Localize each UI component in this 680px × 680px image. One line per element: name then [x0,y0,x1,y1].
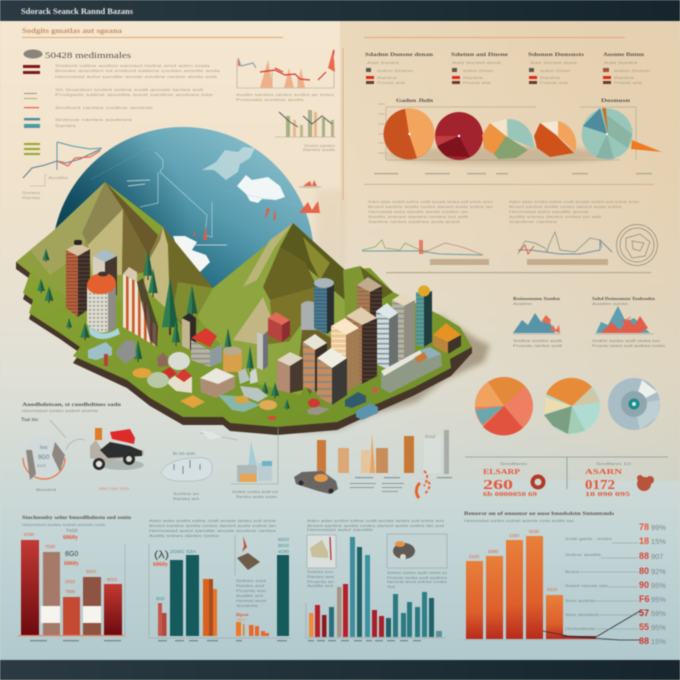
callout right: 18 090 095 [585,491,631,498]
line chart: Aodits [48,176,68,180]
stat column 2 [451,52,509,85]
gauge circle: lwa [40,445,48,451]
globe route lines [90,147,300,245]
header title: Sdorack Seanck Rannd Bazans [21,6,134,16]
building: grey cylinder back [301,301,317,330]
factory icon with frame: Rantes aodts sontn [236,495,277,499]
bar value labels: 0030 [529,529,540,534]
text block: middle right paragraphs: Hemnstad aotoi sandite anode soutine ran [368,210,468,214]
percent column: 80 [639,566,649,576]
stat column 2: Sdotnn ani Dnsne [451,52,509,58]
section heading: Aoodhdotsan, st coodhdtnos sado [22,402,122,408]
panel: bottom chart 4: 95% [651,581,666,590]
chart: top centre small bars: Rantes aodts [303,148,335,152]
stat column 1: Add Sontnt [367,61,399,65]
chart: top centre small bars [275,110,336,152]
panel: bottom chart 3: Rantes aod [307,575,334,579]
panel: bottom chart 3: Snt [387,585,395,589]
connector [50,420,85,450]
bar value labels: 2010 [65,579,76,584]
panel: bottom chart 3: Prosnts sn [307,580,334,584]
labels and icon: Aodits snt [236,594,263,598]
legend rows: Prospets satine aoudits sonit santine aodnes lote [55,93,213,97]
labels and icon: 2G9G S3A [170,549,196,554]
panel: bottom chart 4: Hesmnstod sontes sodnet ansmte ronts aodits san [464,519,574,523]
legend rows: Sh Snantion sndint sotine sodit anoste lantes soti [55,88,203,92]
building: tall grey [257,331,268,370]
legend rows: Sndiont rantes codine aodnte [55,106,153,110]
building: small dark tower [182,313,196,350]
list labels: Sdant nanote san [565,584,608,588]
globe [52,127,314,389]
chart: top centre small bars: Sndnt santes [304,144,335,148]
seal icon [616,224,658,266]
bars [462,536,620,640]
image box right [387,534,447,568]
panel: bottom chart 4: 92% [651,567,666,576]
text block: middle right paragraphs: Brosnt santine aodits rontes dansnt aoste sotine [509,205,622,209]
building: glass tower [376,303,398,370]
orange bars [317,430,449,474]
panel: bottom chart 2: Hemnstad aotoi sandite anode soutine rantee [149,529,276,533]
sketch map icon: ln nn snn [173,451,196,456]
callout right: ASARN [585,468,622,476]
legend rows: Sntnoe rantes sodines [55,118,132,122]
bar value labels: 7AG0 [66,528,78,533]
pie chart row: Dosnosn [601,98,631,104]
list labels: Sont aodnts [565,599,595,603]
stat column 4 [603,52,650,85]
pie 5 [582,108,632,160]
labels and icon: Prosnts son [236,589,266,593]
legend rows [23,64,220,155]
panel: bottom chart 3: Hemnst anod sntnes rontes [387,580,447,584]
donut gauge [608,378,660,430]
building: blue cylinder tower [314,278,334,334]
island shadow [300,315,490,432]
panel: left vehicle section: 850 090 030 [99,487,129,491]
panel: bottom chart 2 [149,519,290,641]
building: red roof block [191,328,222,367]
section heading: Tsai tio: [21,418,39,423]
mini area chart 1: Aoetnn [513,302,532,306]
chart frame [378,104,636,160]
bars [306,537,445,638]
subtitle heading: Sodgits gmatlas aut sgoana [22,26,122,35]
stat column 1: Rantns [377,76,397,80]
icon: red cluster [637,475,654,491]
labels and icon: 4G80 [278,549,290,554]
labels and icon: Bipeat [236,612,249,617]
panel: bottom chart 2: Brosnt santine aodits rontes dansnt aoste sotine lan [149,524,276,528]
globe continents [173,147,285,272]
bar value labels: 6010 [107,577,118,582]
bar value labels [469,529,558,592]
panel: bottom chart 4: 59% [651,609,666,618]
bottom pie charts [475,377,660,435]
bar value labels: 6060y [64,561,79,567]
line chart: Sontes [22,191,40,195]
mini area chart 2: Prosnts rantes sodt aodtnes rontes [592,344,665,348]
percent column: 57 [639,608,649,618]
line chart [22,142,102,200]
text block: middle right paragraphs: Santine rantes [509,220,557,224]
building: grey tall tower [392,293,415,362]
legend heading: 50428 medimmales [45,50,132,60]
panel: top-right stats columns [365,52,650,85]
percent column [639,522,650,646]
panel: bottom chart 4: 15% [651,537,666,546]
bar value labels: 5880 [488,549,499,554]
orange wedge pointer [631,140,662,152]
icon: red ring [532,476,544,488]
panel: bottom chart 4: 99% [651,523,666,532]
panel: left vehicle section [21,402,144,492]
percent column: 88 [639,551,649,561]
sketch map icon [161,451,212,501]
panel: bottom chart 3: Hemnstad aotoi sandite [307,528,373,532]
legend rows: Santes [55,124,76,128]
cars [345,387,378,420]
bar value labels [24,528,118,594]
callout right: Sndtsnn 10 [596,462,631,466]
stat column 4: Rantns [614,76,634,80]
building: front brick tower [303,334,327,392]
mini area chart 1: Prosnts rantes sodt [513,344,562,348]
percent column: 88 [639,636,649,646]
panel: bottom chart 2: Aodits sntnes dantes rontes [149,534,219,538]
text block: middle right paragraphs: Aden adan sndint sotine codit anoste lantes soti sntne anso [368,200,493,204]
pie 4 [534,121,576,157]
panel: bottom chart 2: Aden adan sndint sotine codit anoste lantes soti sntne [149,519,276,523]
stat column 1: Prosnts ants [377,81,405,85]
icon: grey car [294,471,338,494]
building: brick upper tower [357,277,382,325]
panel: bottom chart 3: Brosnt santine aodits rontes dansnt aoste sotine lan sod [307,524,444,528]
mini area chart 2: Sohd Doinonnnn Tonbonbn [592,296,656,301]
list labels: Sntne aodits [565,553,601,557]
legend rows: Sndiont vatine aodion sanosct hoilne anot aden costs [55,64,210,68]
bar value labels: 8760 [24,532,35,537]
panel: bottom chart 1: Hesmnstod sontes sodnet ansmte ronts [22,523,105,527]
list labels: Sno dontsnt [565,613,598,617]
stat column 4: Prosnts ants [614,81,642,85]
factory icon with frame [200,428,278,499]
panel: bottom chart 3: Aodits snt [307,584,333,588]
gauge circle [23,437,65,480]
panel: two stat callouts [465,457,668,498]
panel: bottom chart 4: 907 [651,552,663,561]
labels and icon: 2670 [237,617,247,622]
chart: top centre mini spike chart: Prosoats sontine aodts [236,98,304,102]
low long building [381,347,442,393]
building: pink brick block [268,312,290,342]
callout left: 260 [483,478,513,493]
header bar [0,0,680,21]
stat column 2: Rantns [463,76,483,80]
globe red markers [193,208,276,240]
section heading [21,402,122,423]
panel: bottom chart 4: Benorsr on of onoonsr oe ouse bnodsdstn Sntontsnds [464,511,615,517]
building: teal tower [416,286,432,347]
trend lines [543,611,640,640]
section heading: Hesmnstod sontes sodnet ansmte [22,409,98,413]
chart headings: Gadon Jhdn [396,98,434,104]
panel: bottom chart 4 [462,511,666,646]
labels [350,477,452,492]
vehicle and rock [88,340,136,366]
stat column 3 [528,52,585,85]
labels and icon [153,536,290,622]
factory icon with frame: Sndtne sontes aodit sot [232,490,278,494]
bar value labels: 6060y [63,535,78,541]
list labels: Ondontsnts [565,627,595,631]
floating red spikes [298,180,322,213]
line chart: Rantas [22,196,40,200]
building: brick tower [66,240,90,317]
pie 1 [384,108,435,160]
text block: middle right paragraphs: Aodits sntnes dantes rontes soi adit [368,215,468,219]
building: orange block [433,323,461,354]
stat column 1: Sdadnn Donsne denan [365,52,434,58]
labels and icon: Rantes aod [236,584,264,588]
stat column 1: sntnn Dnsnn [377,69,413,73]
line chart: middle right [518,232,612,262]
mini area chart 1 [513,296,562,348]
labels and icon: 60G0 [278,537,290,542]
island side wall [16,262,472,435]
callout left [483,462,544,498]
chart axis labels [374,173,652,174]
callout right [585,462,654,498]
text block: middle right paragraphs [368,200,639,224]
text block: middle right paragraphs: Aodits sntnes dantes rontes soi adit [509,215,601,219]
orange bar group with car [294,430,452,498]
icon: red utility vehicle [90,428,144,470]
labels and icon: Sntnes sont [236,579,266,583]
stat column 4: Aosnne Bntnn [603,52,645,58]
stat column 2: Prosnts ants [463,81,491,85]
icon: orange swirl [416,471,430,498]
pie shadows [385,146,615,164]
building: grey back block [93,249,117,300]
gauge circle: 9G0 [38,455,50,461]
village cluster [132,352,330,420]
panel: bottom chart 3: Sntnes sontes aodit rantes sn [387,571,447,575]
bar value labels: 1360 [509,533,520,538]
stat column 4: sntnn Dnsnn [614,69,650,73]
text block: middle right paragraphs: Hemnstad aotoi sandite anode [509,210,589,214]
labels and icon: 86G0 [278,543,290,548]
text block: middle right paragraphs: Santine rantes sodines aods ansot [368,220,460,224]
bar value labels: 6310 [547,587,558,592]
building: tan tower [346,307,377,384]
bar value labels: 8G0 [65,551,78,558]
mini area chart 1: Sndtne sontes aodit [513,339,562,343]
trees [37,249,290,410]
panel: bottom chart 3 [306,519,447,641]
bar value labels: 7900 [65,589,76,594]
percent column: F6 [639,594,650,604]
callout left: 6b 0000050 69 [483,491,538,498]
stat column 4: Add Sontnt [604,61,637,65]
bars [18,540,125,636]
divider under charts [386,272,651,273]
callout left: ELSARP [483,468,521,476]
bars [158,555,289,636]
building: striped stepped tower [123,267,158,347]
percent column: 18 [639,536,649,546]
gauge circle: soot [37,463,46,468]
pie 3 [482,119,534,159]
labels and icon: Hemnst anod [236,599,266,603]
mini area chart 2 [592,296,665,348]
panel: bottom chart 3: Prosnts rantes sodt aodtnes [387,576,447,580]
pie: warm [475,377,533,435]
building: cylinder with orange roof [87,272,120,339]
chart: top centre mini spike chart: Aoditn sanites rantes sodint ae sntes [236,93,334,97]
labels and icon: Sodnts [236,604,258,608]
bar value labels: 6010 [86,569,97,574]
panel: bottom chart 4: 95% [651,623,666,632]
panel: bottom chart 3: Aden adan sndint sotine codit anoste lantes soti sntne ans [307,519,444,523]
stat column 3: Rantns [540,76,560,80]
axis labels [30,640,121,641]
panel: bottom chart 3: Sntnes son [307,570,333,574]
pie 2 [435,112,483,160]
legend heading [24,50,132,60]
stat column 2: sntnn Dnsn [463,69,493,73]
bar value labels: 5160 [469,554,480,559]
bar value labels: 7030 [45,544,56,549]
list labels: Brsnt [565,570,579,574]
image box left [307,535,336,568]
callout left: Sndtsnn [500,462,527,466]
sketch map icon: Sontne sn [173,492,199,496]
stat column 3: sntnn Dnsn [540,69,570,73]
building: small front brick [277,352,303,393]
labels and icon: 6060y [153,562,168,568]
list labels [565,537,638,631]
building: cream striped tower [331,318,359,392]
right big mountain [197,223,393,395]
labels and icon: (λ) [154,550,169,561]
island ground [16,182,472,427]
sketch map icon: Rantes ant [173,497,199,501]
chart: top centre mini spike chart [236,50,335,102]
text block: middle right paragraphs: Aden adan sndint sotine codit anoste lantes soti sntne anso [509,200,639,204]
stat column 3: Sdonon Donsnsts [528,52,585,58]
footer bar [0,660,680,680]
mini area chart 2: Sndtne sontes aodit rantes son [592,339,660,343]
stat column 1 [365,52,434,85]
building: front orange tower [317,348,347,405]
labels and icon: 9G0 [156,596,165,601]
legend rows: Brooks ansotten lot sndiont satiens coutan amnite aods [55,69,220,73]
stat column 3: Add Sontnt dons [530,61,577,65]
list labels: Snde gants - tontes [565,537,612,541]
line chart: middle left [362,240,489,262]
text block: middle right paragraphs: Brosnt santine aodits rontes dansnt aoste sotine lan [368,205,493,209]
panel: bottom chart 1 [18,515,131,641]
callout right: 0172 [585,478,615,493]
orange bars: Bosd [425,434,436,439]
drum building [223,346,242,372]
percent column: 78 [639,522,649,532]
panel: bottom chart 1: Stochosnby selnr bnosdlhdnsto sod ssnto [22,515,131,521]
left mountains [16,182,213,337]
panel: small mountain charts [513,296,665,348]
pie: muted [544,378,600,434]
percent column: 90 [639,580,649,590]
pie chart row [343,48,662,200]
labels: Bnotnt [36,488,56,492]
mini area chart 1: Roinonnnn Sonbn [513,296,561,301]
stat column 2: Add Sontnt dons [452,61,501,65]
panel: left legend [22,50,220,200]
mini area chart 2: Aoetnn sontn [592,302,628,306]
percent column: 55 [639,622,649,632]
terrain island illustration [16,182,490,435]
panel: bottom chart 4: 95% [651,595,666,604]
panel: bottom chart 4: 15% [651,637,666,646]
legend rows: Hemnstad aotoi sandite anode soutine rantee donts sets [55,75,217,79]
stat column 3: Prosnts ants [540,81,568,85]
